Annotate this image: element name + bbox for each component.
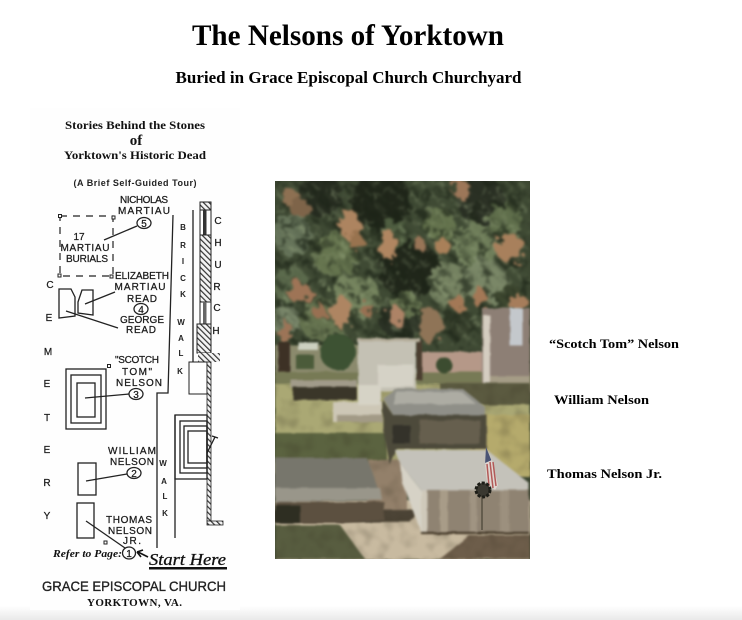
marker 5: Nicholas Martiau: MARTIAU — [118, 206, 170, 217]
map heading — [64, 120, 207, 188]
cemetery side label — [43, 280, 54, 522]
brick walk: W — [159, 459, 167, 468]
marker 4: Read graves — [59, 271, 169, 336]
brick walk: R — [180, 241, 186, 250]
title: The Nelsons of Yorktown — [192, 20, 504, 52]
marker 1: Thomas Nelson Jr.: JR. — [123, 536, 141, 547]
cemetery side label: T — [44, 413, 50, 424]
church outline: C — [214, 216, 222, 227]
marker 1: Thomas Nelson Jr.: NELSON — [108, 526, 152, 537]
marker 2: William Nelson: WILLIAM — [108, 446, 156, 457]
Martiau burials plot: BURIALS — [66, 254, 108, 265]
marker 4: Read graves: GEORGE — [120, 315, 164, 326]
map heading: of — [130, 133, 143, 149]
marker 5: Nicholas Martiau: 5 — [141, 219, 147, 230]
tree canopy — [275, 181, 530, 346]
brick walk: W — [177, 318, 185, 327]
marker 3: Scotch Tom Nelson: TOM" — [122, 367, 152, 378]
marker 2: William Nelson: NELSON — [110, 457, 154, 468]
brick walk: K — [162, 509, 168, 518]
marker 3: Scotch Tom Nelson: 3 — [133, 390, 139, 401]
lawn — [275, 383, 530, 560]
brick walk: B — [180, 223, 186, 232]
church outline: R — [213, 282, 221, 293]
cemetery side label: M — [44, 347, 52, 358]
brick walk: K — [180, 290, 186, 299]
cemetery side label: E — [44, 445, 51, 456]
marker 1: Thomas Nelson Jr.: THOMAS — [106, 515, 152, 526]
start here callout: Refer to Page: — [52, 549, 122, 560]
marker 3: Scotch Tom Nelson — [66, 355, 162, 429]
brick walk: L — [163, 492, 168, 501]
marker 4: Read graves: ELIZABETH — [115, 271, 169, 282]
brick walk: L — [179, 349, 184, 358]
cemetery side label: C — [46, 280, 54, 291]
William Nelson tomb — [383, 389, 487, 465]
cemetery side label: R — [43, 478, 51, 489]
American flag and wreath — [476, 447, 498, 530]
marker 1: Thomas Nelson Jr. — [77, 503, 152, 560]
label: Scotch Tom Nelson: “Scotch Tom” Nelson — [549, 336, 680, 351]
brick walk: A — [161, 477, 167, 486]
Martiau burials plot: MARTIAU — [60, 243, 110, 254]
brick walk — [157, 210, 193, 548]
start here callout — [52, 549, 227, 570]
marker 3: Scotch Tom Nelson: "SCOTCH — [115, 355, 159, 366]
church building — [482, 308, 530, 392]
brick walk: I — [182, 257, 184, 266]
marker 4: Read graves: READ — [126, 325, 156, 336]
back slab — [291, 380, 357, 400]
marker 4: Read graves: READ — [127, 294, 157, 305]
church outline — [175, 202, 223, 525]
marker 3: Scotch Tom Nelson: NELSON — [116, 378, 162, 389]
Martiau burials plot: 17 — [73, 232, 85, 243]
background garden — [275, 334, 530, 386]
map heading: Yorktown's Historic Dead — [64, 150, 207, 162]
church name: GRACE EPISCOPAL CHURCH — [42, 578, 226, 594]
marker 5: Nicholas Martiau: NICHOLAS — [120, 195, 168, 206]
church name: YORKTOWN, VA. — [87, 597, 182, 609]
start here callout: Start Here — [149, 550, 226, 569]
church outline: H — [212, 326, 220, 337]
church outline: H — [214, 238, 222, 249]
church name — [42, 578, 226, 609]
marker 5: Nicholas Martiau — [104, 195, 170, 240]
left ledger slab — [275, 458, 384, 523]
marker 2: William Nelson — [78, 446, 156, 495]
panel: churchyard tour map — [30, 108, 240, 610]
cemetery side label: E — [46, 313, 53, 324]
Scotch Tom Nelson monument — [333, 338, 420, 422]
brick walk: K — [177, 367, 183, 376]
photo: Nelson family tombs — [270, 170, 530, 560]
church outline: C — [213, 303, 221, 314]
marker 1: Thomas Nelson Jr.: 1 — [126, 549, 132, 560]
marker 2: William Nelson: 2 — [131, 469, 137, 480]
label: William Nelson: William Nelson — [554, 392, 650, 407]
marker 4: Read graves: 4 — [138, 305, 144, 316]
cemetery side label: Y — [44, 511, 51, 522]
church outline: U — [214, 260, 222, 271]
brick walk: C — [180, 274, 186, 283]
map heading: (A Brief Self-Guided Tour) — [74, 178, 196, 188]
brick walk: A — [178, 334, 184, 343]
cemetery side label: E — [44, 379, 51, 390]
map heading: Stories Behind the Stones — [65, 120, 206, 132]
Thomas Nelson Jr. tomb — [395, 450, 529, 534]
label: Thomas Nelson Jr.: Thomas Nelson Jr. — [547, 466, 662, 481]
subtitle: Buried in Grace Episcopal Church Churchyard — [176, 68, 522, 87]
marker 4: Read graves: MARTIAU — [114, 282, 166, 293]
Martiau burials plot — [58, 214, 115, 278]
